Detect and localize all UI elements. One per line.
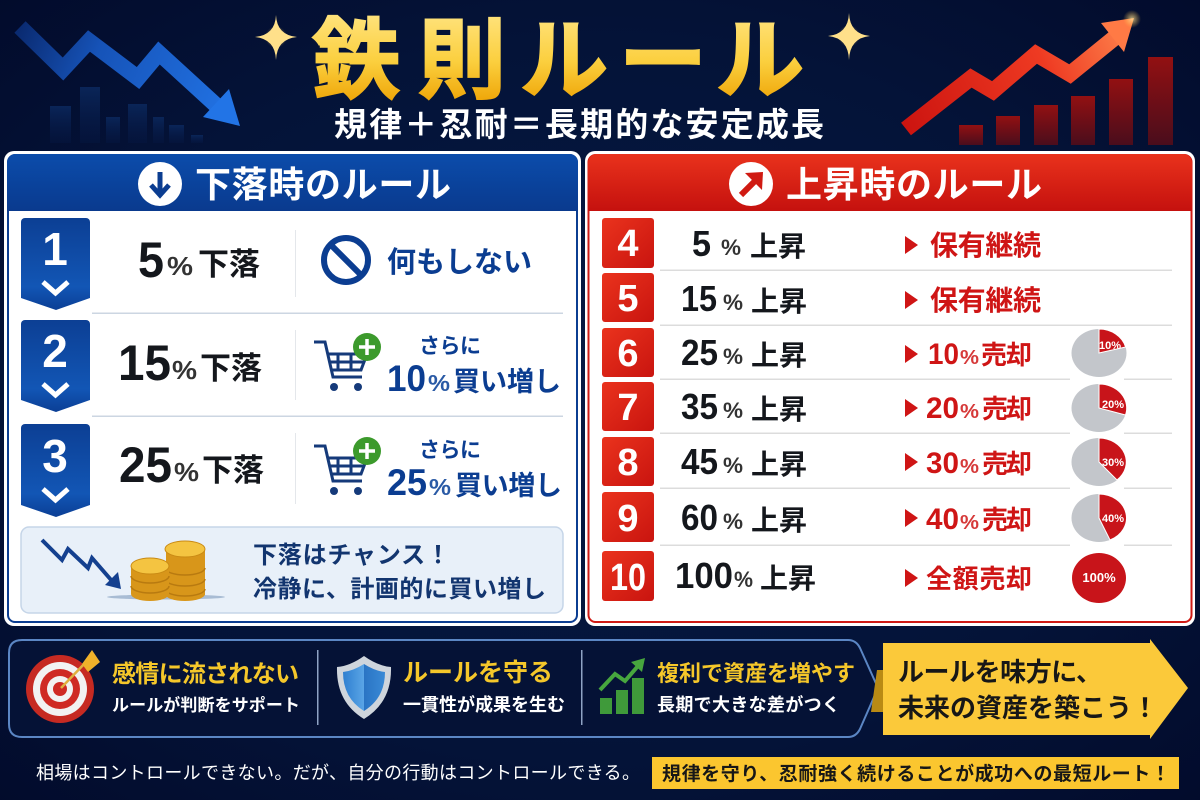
rule row 2 (21, 320, 561, 412)
rule row 9 (602, 492, 1127, 542)
rule row 6: % (960, 347, 979, 369)
rule row 3: さらに (419, 439, 481, 462)
footer highlight: 規律を守り、忍耐強く続けることが成功への最短ルート！ (662, 762, 1170, 785)
rule row 4 (602, 218, 1041, 268)
principle 3 text (657, 661, 855, 715)
icon: target with dart (26, 650, 100, 723)
rule row 7 (602, 382, 1127, 432)
rule row 4: 5 (692, 223, 711, 264)
rule row 10: 上昇 (760, 563, 816, 594)
rule row 10: % (734, 567, 753, 592)
rule row 7: 20 (926, 392, 959, 425)
rule row 3: % (429, 474, 451, 500)
rule row 4: 上昇 (750, 231, 806, 262)
callout: falling is a chance: 冷静に、計画的に買い増し (253, 576, 546, 603)
rule row 7: 売却 (982, 394, 1032, 424)
icon: right sparkle (828, 13, 870, 60)
principle 3 text: 複利で資産を増やす (657, 661, 855, 686)
icon: left sparkle (255, 15, 297, 60)
principle 2 text: 一貫性が成果を生む (403, 694, 565, 715)
principle 3 text: 長期で大きな差がつく (657, 694, 840, 715)
rule row 10: 100 (675, 555, 733, 596)
rule row 8: % (960, 456, 979, 478)
rule row 1: % (167, 251, 193, 281)
rule row 3: % (174, 457, 199, 487)
rule row 3: 3 (42, 430, 68, 482)
principle 1 text (112, 661, 300, 715)
icon: cart with plus (314, 333, 381, 391)
rule row 9: % (723, 509, 743, 534)
callout: falling is a chance (21, 527, 563, 613)
rule row 2: さらに (419, 335, 481, 358)
principle 2 text (403, 659, 565, 715)
rule row 5: 保有継続 (930, 285, 1041, 316)
rule row 7: 35 (681, 386, 718, 427)
rule row 2: 下落 (200, 351, 262, 386)
rule row 9: 60 (681, 497, 718, 538)
rule row 10: 全額売却 (926, 564, 1032, 594)
rule row 9: 売却 (982, 505, 1032, 535)
chart: falling blue arrow (20, 27, 240, 143)
pie chart: 100% (1072, 553, 1126, 603)
icon: shield (337, 656, 391, 719)
icon: zigzag down arrow (42, 540, 121, 589)
rule row 3 (21, 424, 562, 517)
rule row 2: % (428, 370, 450, 396)
principle 1 text: ルールが判断をサポート (112, 695, 300, 715)
rule row 8: 売却 (982, 449, 1032, 479)
rule row 2: 買い増し (453, 367, 561, 397)
pie chart: 40%: 40% (1102, 513, 1124, 525)
rule row 6: 6 (617, 333, 639, 375)
rule row 2: 2 (42, 325, 68, 377)
panel header: falling: 下落時のルール (195, 164, 451, 205)
rule row 7: 7 (617, 387, 639, 429)
rule row 1: 5 (138, 232, 164, 288)
banner: three principles (9, 640, 878, 737)
icon: coin stacks (107, 541, 225, 601)
rule row 2: 10 (387, 358, 426, 399)
callout arrow: make rules your ally: 未来の資産を築こう！ (898, 693, 1158, 723)
rule row 5 (602, 273, 1041, 322)
rule row 1 (21, 218, 532, 310)
rule row 4: 保有継続 (930, 230, 1041, 261)
callout arrow: make rules your ally: ルールを味方に、 (898, 657, 1102, 687)
principle 2 text: ルールを守る (403, 659, 553, 687)
rule row 2: % (172, 355, 197, 385)
pie chart: 10% (1072, 329, 1126, 377)
rule row 4: % (721, 235, 741, 260)
rule row 6: 売却 (981, 340, 1032, 370)
rule row 5: 5 (617, 278, 639, 320)
rule row 1: 1 (42, 223, 68, 275)
callout: falling is a chance: 下落はチャンス！ (253, 542, 450, 569)
rule row 6 (602, 328, 1126, 377)
icon: growth chart (600, 658, 645, 714)
pie chart: 30% (1072, 438, 1126, 486)
rule row 7: % (960, 401, 979, 423)
rule row 6: % (723, 344, 743, 369)
pie chart: 100%: 100% (1082, 570, 1116, 585)
panel: rising market rules (585, 151, 1195, 626)
rule row 9: % (960, 512, 979, 534)
rule row 7: % (723, 398, 743, 423)
title: 鉄則ルール (312, 11, 804, 110)
pie chart: 30%: 30% (1102, 457, 1124, 469)
rule row 10 (602, 551, 1126, 603)
subtitle: 規律＋忍耐＝長期的な安定成長 (334, 106, 824, 143)
rule row 3: 買い増し (455, 471, 562, 501)
footer statement: 相場はコントロールできない。だが、自分の行動はコントロールできる。 (36, 763, 640, 783)
rule row 5: 15 (681, 278, 717, 319)
rule row 3: 25 (119, 437, 172, 493)
rule row 10: 10 (610, 557, 646, 599)
pie chart: 20%: 20% (1102, 399, 1124, 411)
rule row 3: 下落 (202, 453, 264, 488)
rule row 8 (602, 437, 1126, 486)
rule row 7: 上昇 (751, 394, 807, 425)
rule row 8: 上昇 (751, 449, 807, 480)
rule row 9: 上昇 (751, 505, 807, 536)
pie chart: 10%: 10% (1099, 340, 1121, 352)
rule row 8: 30 (926, 447, 959, 480)
rule row 9: 40 (926, 503, 959, 536)
panel: falling market rules (4, 151, 581, 626)
pie chart: 40% (1072, 494, 1127, 542)
rule row 6: 25 (681, 332, 718, 373)
rule row 8: 45 (681, 441, 718, 482)
rule row 8: 8 (617, 442, 639, 484)
rule row 2: 15 (118, 335, 171, 391)
rule row 3: 25 (387, 462, 427, 503)
rule row 5: % (723, 290, 743, 315)
rule row 6: 10 (928, 338, 959, 371)
panel header: rising: 上昇時のルール (786, 164, 1042, 205)
panel header: rising (588, 154, 1192, 211)
rule row 6: 上昇 (751, 340, 807, 371)
principle 1 text: 感情に流されない (112, 661, 299, 688)
rule row 1: 何もしない (387, 246, 532, 279)
pie chart: 20% (1072, 384, 1127, 432)
rule row 4: 4 (617, 223, 639, 265)
rule row 9: 9 (617, 498, 639, 540)
icon: cart with plus (314, 437, 381, 495)
panel header: falling (7, 154, 578, 211)
footer highlight (652, 757, 1179, 789)
rule row 5: 上昇 (751, 286, 807, 317)
rule row 8: % (723, 453, 743, 478)
rule row 1: 下落 (198, 247, 260, 282)
callout arrow: make rules your ally (871, 639, 1188, 739)
chart: rising red arrow (906, 10, 1173, 145)
